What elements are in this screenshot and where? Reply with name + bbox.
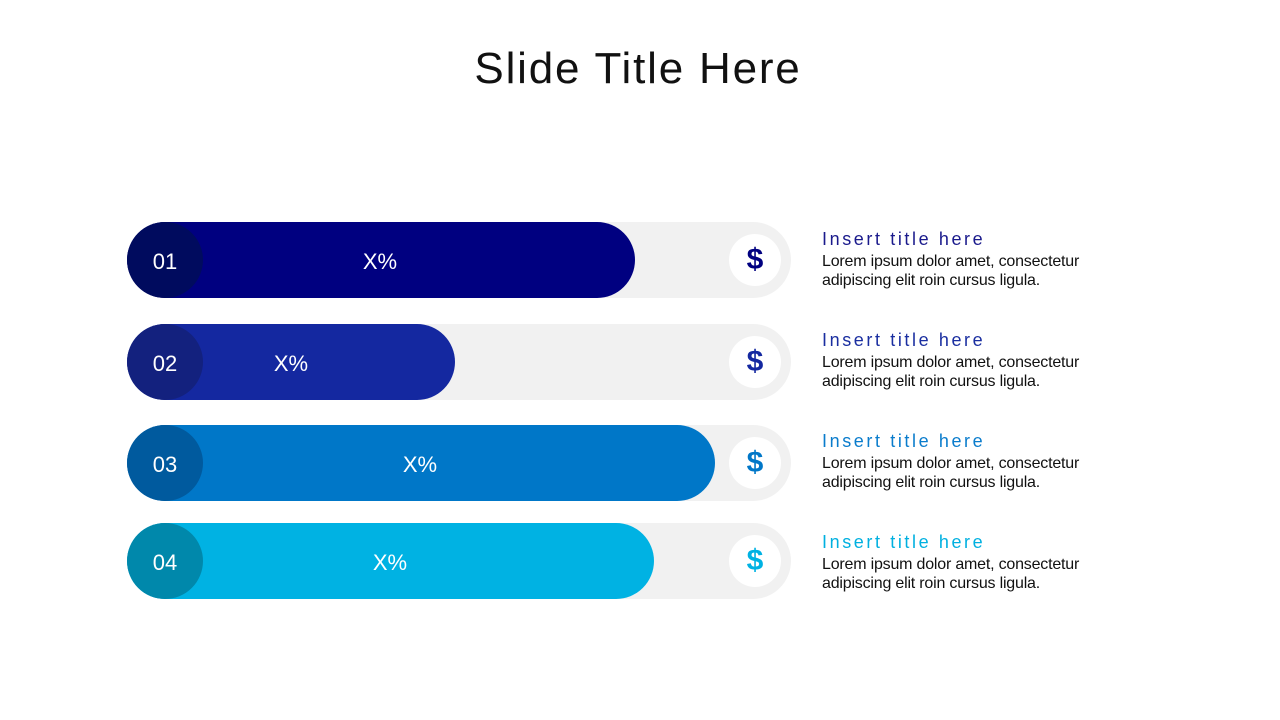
icon: dollar 1 [729, 234, 781, 286]
bar row 3 [127, 425, 791, 501]
value 2: X% [274, 351, 308, 376]
bar row 1 [127, 222, 791, 298]
text block 2: adipiscing elit roin cursus ligula. [822, 373, 1040, 390]
number 03 [127, 425, 203, 501]
value 4: X% [373, 550, 407, 575]
number 02: 02 [153, 351, 177, 376]
number 01: 01 [153, 249, 177, 274]
title: Slide Title Here [474, 44, 802, 93]
number 04: 04 [153, 550, 177, 575]
text block 1 [822, 229, 1080, 289]
fill bar 3 [127, 425, 715, 501]
text block 2: Insert title here [822, 330, 985, 350]
icon: dollar 1: $ [747, 243, 763, 276]
number 04 [127, 523, 203, 599]
text block 4: Lorem ipsum dolor amet, consectetur [822, 556, 1079, 573]
text block 3: Insert title here [822, 431, 985, 451]
fill bar 1 [127, 222, 635, 298]
fill bar 2 [127, 324, 455, 400]
fill bar 4 [127, 523, 654, 599]
text block 2 [822, 330, 1080, 390]
icon: dollar 4 [729, 535, 781, 587]
icon: dollar 4: $ [747, 544, 763, 577]
icon: dollar 3: $ [747, 446, 763, 479]
bar row 2 [127, 324, 791, 400]
text block 3 [822, 431, 1080, 491]
icon: dollar 3 [729, 437, 781, 489]
text block 3: Lorem ipsum dolor amet, consectetur [822, 455, 1079, 472]
text block 4: adipiscing elit roin cursus ligula. [822, 575, 1040, 592]
text block 1: Lorem ipsum dolor amet, consectetur [822, 253, 1079, 270]
text block 2: Lorem ipsum dolor amet, consectetur [822, 354, 1079, 371]
icon: dollar 2 [729, 336, 781, 388]
text block 4: Insert title here [822, 532, 985, 552]
bar row 4 [127, 523, 791, 599]
value 3: X% [403, 452, 437, 477]
number 02 [127, 324, 203, 400]
text block 3: adipiscing elit roin cursus ligula. [822, 474, 1040, 491]
icon: dollar 2: $ [747, 345, 763, 378]
number 03: 03 [153, 452, 177, 477]
text block 1: adipiscing elit roin cursus ligula. [822, 272, 1040, 289]
text block 1: Insert title here [822, 229, 985, 249]
value 1: X% [363, 249, 397, 274]
number 01 [127, 222, 203, 298]
text block 4 [822, 532, 1080, 592]
